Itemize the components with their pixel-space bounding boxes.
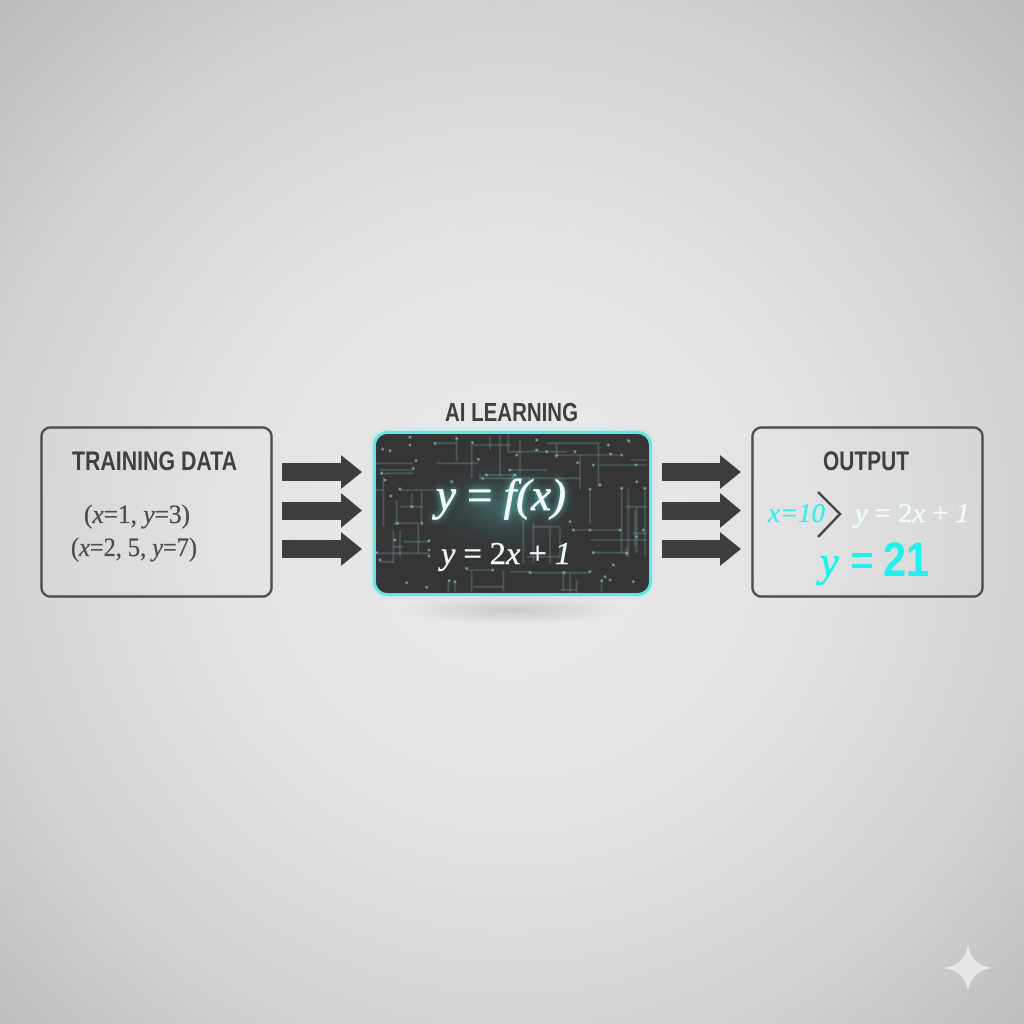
arrow 2 xyxy=(282,493,362,528)
result value 21: 21 xyxy=(883,534,929,587)
data point 1: (x=1, y=3) xyxy=(84,500,190,529)
panel outer glow xyxy=(374,432,651,595)
data points xyxy=(71,500,197,562)
panel: AI learning xyxy=(373,432,651,595)
arrow 1 xyxy=(662,455,741,489)
formula: y = f(x): y = f(x) xyxy=(432,471,566,520)
circuit pattern xyxy=(373,433,647,593)
result y: y xyxy=(816,540,839,586)
heading: AI learning: AI LEARNING xyxy=(445,397,578,427)
formula: y = 2x + 1: y = 2x + 1 xyxy=(438,535,571,571)
data point 2: (x=2, 5, y=7) xyxy=(71,533,197,562)
chevron xyxy=(818,492,840,537)
result equals xyxy=(852,553,872,568)
arrow 1 xyxy=(282,455,362,489)
panel body xyxy=(374,432,650,594)
arrow 2 xyxy=(662,493,741,528)
panel shadow xyxy=(397,595,627,625)
heading: training data: TRAINING DATA xyxy=(72,446,237,476)
icon: sparkle watermark xyxy=(944,944,992,992)
training data box xyxy=(42,428,272,596)
heading: output: OUTPUT xyxy=(823,446,909,476)
arrow 3 xyxy=(662,532,741,566)
panel: training data xyxy=(42,428,272,596)
arrows: AI learning to output xyxy=(662,455,741,566)
arrow 3 xyxy=(282,532,362,566)
function: y = 2x + 1: y = 2x + 1 xyxy=(852,498,970,528)
input: x=10: x=10 xyxy=(767,498,825,528)
result: y = 21 xyxy=(816,534,929,587)
output box xyxy=(752,428,982,596)
arrows: training data to AI learning xyxy=(282,455,362,566)
panel: output xyxy=(752,428,982,596)
